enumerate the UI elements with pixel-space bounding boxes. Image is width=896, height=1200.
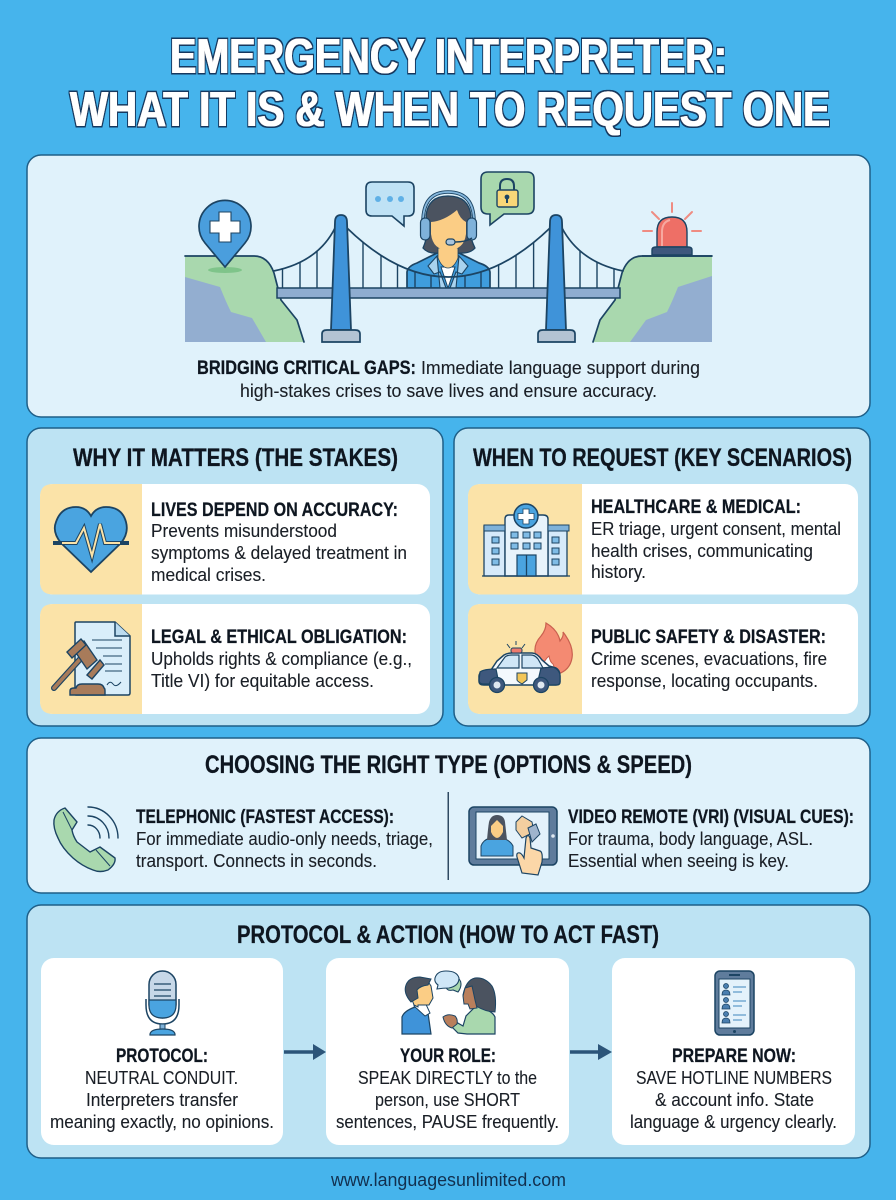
- text: public safety and disaster: [591, 626, 827, 691]
- bridge cables: [274, 228, 623, 288]
- hero caption: [197, 357, 700, 401]
- icon: two people talking: [402, 971, 496, 1034]
- text: prepare now: & account info. State: [655, 1089, 814, 1110]
- hero caption: BRIDGING CRITICAL GAPS:: [197, 358, 416, 379]
- icon: speech bubble with padlock: [481, 172, 534, 225]
- deck: [277, 288, 620, 298]
- hero caption: high-stakes crises to save lives and ensure accuracy.: [240, 380, 657, 401]
- text: telephonic: TELEPHONIC (FASTEST ACCESS):: [136, 806, 394, 828]
- heading: choosing the right type: CHOOSING THE RIGHT TYPE (OPTIONS & SPEED): [205, 751, 692, 779]
- panel: why it matters: [27, 428, 443, 726]
- text: telephonic: [136, 806, 433, 871]
- title: [70, 30, 830, 137]
- text: your role: YOUR ROLE:: [400, 1045, 496, 1067]
- icon: tablet with interpreter and signing hands: [469, 807, 557, 875]
- card: protocol: [41, 958, 283, 1145]
- tower left: [322, 215, 360, 342]
- text: public safety and disaster: Crime scenes, evacuations, fire: [591, 648, 827, 669]
- text: protocol: meaning exactly, no opinions.: [50, 1111, 274, 1132]
- text: prepare now: [630, 1045, 837, 1132]
- text: prepare now: SAVE HOTLINE NUMBERS: [636, 1067, 832, 1088]
- right cliff: [593, 256, 712, 342]
- text: healthcare and medical: HEALTHCARE & MEDICAL:: [591, 496, 801, 518]
- text: prepare now: PREPARE NOW:: [672, 1045, 796, 1067]
- card: legal and ethical obligation: [40, 604, 430, 714]
- text: your role: sentences, PAUSE frequently.: [336, 1111, 559, 1132]
- panel: hero bridging critical gaps: [27, 155, 870, 417]
- panel: protocol and action: [27, 905, 870, 1158]
- text: your role: [336, 1045, 559, 1132]
- icon: medical pin: [199, 200, 251, 273]
- text: legal and ethical obligation: [151, 626, 412, 691]
- text: lives depend on accuracy: Prevents misunderstood: [151, 520, 337, 541]
- heading: protocol and action: PROTOCOL & ACTION (HOW TO ACT FAST): [237, 921, 659, 949]
- text: lives depend on accuracy: [151, 499, 407, 585]
- illustration: bridge between cliffs: [185, 172, 712, 342]
- text: public safety and disaster: PUBLIC SAFETY & DISASTER:: [591, 626, 826, 648]
- icon: green telephone: [54, 807, 118, 872]
- option: telephonic: [54, 806, 433, 872]
- text: video remote: For trauma, body language, ASL.: [568, 828, 813, 849]
- text: telephonic: transport. Connects in seconds.: [136, 850, 377, 871]
- text: healthcare and medical: [591, 496, 841, 582]
- panel: choosing the right type: [27, 738, 870, 893]
- tower right: [538, 215, 575, 342]
- text: your role: person, use SHORT: [375, 1089, 520, 1110]
- text: lives depend on accuracy: symptoms & delayed treatment in: [151, 542, 407, 563]
- text: protocol: PROTOCOL:: [116, 1045, 208, 1067]
- text: protocol: NEUTRAL CONDUIT.: [85, 1067, 238, 1088]
- title: EMERGENCY INTERPRETER:: [170, 30, 727, 84]
- text: protocol: Interpreters transfer: [86, 1089, 238, 1110]
- text: prepare now: language & urgency clearly.: [630, 1111, 837, 1132]
- text: protocol: [50, 1045, 274, 1132]
- text: healthcare and medical: ER triage, urgent consent, mental: [591, 518, 841, 539]
- text: your role: SPEAK DIRECTLY to the: [358, 1067, 537, 1088]
- text: lives depend on accuracy: LIVES DEPEND ON ACCURACY:: [151, 499, 398, 521]
- left cliff: [185, 256, 304, 342]
- text: lives depend on accuracy: medical crises.: [151, 564, 266, 585]
- icon: document and gavel: [54, 622, 130, 695]
- panel: when to request: [454, 428, 870, 726]
- card: public safety and disaster: [468, 604, 858, 714]
- text: legal and ethical obligation: LEGAL & ETHICAL OBLIGATION:: [151, 626, 407, 648]
- icon: speech bubble with dots: [366, 182, 414, 226]
- arrow: your role to prepare now: [570, 1044, 612, 1060]
- interpreter with headset: [407, 192, 490, 288]
- footer url: www.languagesunlimited.com: [330, 1170, 566, 1190]
- icon: emergency siren: [642, 203, 712, 256]
- text: video remote: Essential when seeing is key.: [568, 850, 789, 871]
- card: prepare now: [612, 958, 855, 1145]
- arrow: protocol to your role: [284, 1044, 326, 1060]
- text: legal and ethical obligation: Upholds rights & compliance (e.g.,: [151, 648, 412, 669]
- icon: microphone: [146, 971, 179, 1035]
- icon: heart with pulse: [53, 507, 129, 572]
- text: public safety and disaster: response, locating occupants.: [591, 670, 818, 691]
- hero caption: Immediate language support during: [421, 357, 700, 378]
- heading: why it matters: WHY IT MATTERS (THE STAKES): [73, 444, 398, 472]
- icon: police car and fire: [479, 623, 572, 692]
- text: video remote: [568, 806, 854, 871]
- card: healthcare and medical: [468, 484, 858, 594]
- icon: smartphone contact list: [715, 971, 754, 1035]
- card: your role: [326, 958, 569, 1145]
- icon: hospital: [482, 504, 570, 576]
- text: telephonic: For immediate audio-only needs, triage,: [136, 828, 433, 849]
- text: healthcare and medical: health crises, communicating: [591, 540, 813, 561]
- option: video remote: [469, 806, 854, 875]
- card: lives depend on accuracy: [40, 484, 430, 594]
- text: healthcare and medical: history.: [591, 561, 646, 582]
- text: legal and ethical obligation: Title VI) for equitable access.: [151, 670, 374, 691]
